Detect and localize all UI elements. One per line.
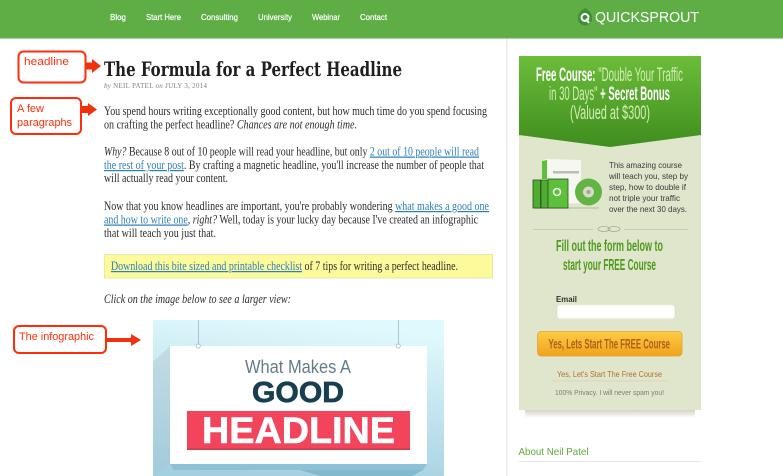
nav links bbox=[110, 12, 388, 22]
paragraph 2: the rest of your post. By crafting a magnetic headline, you'll increase the number of people that bbox=[104, 158, 484, 172]
paragraph 2: will actually read your content. bbox=[104, 171, 228, 185]
paragraph 1 bbox=[104, 104, 487, 132]
arrow: infographic bbox=[106, 334, 141, 346]
nav links: Start Here bbox=[146, 12, 181, 22]
form heading: start your FREE Course bbox=[563, 257, 656, 274]
sign: What Makes A bbox=[245, 357, 351, 377]
ornament divider bbox=[533, 226, 688, 232]
annotation: the infographic bbox=[14, 326, 141, 353]
panel header: Free Course: "Double Your Traffic bbox=[536, 65, 683, 86]
course description: not triple your traffic bbox=[609, 193, 680, 203]
logo: QUICKSPROUT bbox=[595, 9, 699, 26]
image caption: Click on the image below to see a larger view: bbox=[104, 292, 291, 306]
icon: course box and disc bbox=[533, 159, 602, 209]
paragraph 3: Now that you know headlines are important, you're probably wondering what makes a good one bbox=[104, 199, 489, 213]
paragraph 2: Why? Because 8 out of 10 people will read your headline, but only 2 out of 10 people will read bbox=[104, 144, 479, 158]
checklist callout: Download this bite sized and printable checklist of 7 tips for writing a perfect headline. bbox=[111, 259, 458, 273]
panel header: in 30 Days" + Secret Bonus bbox=[549, 84, 670, 105]
panel header bbox=[519, 56, 701, 147]
nav links: University bbox=[258, 12, 293, 22]
cta button: Yes, Lets Start The FREE Course bbox=[548, 336, 670, 352]
headline: The Formula for a Perfect Headline bbox=[104, 58, 402, 81]
panel header: (Valued at $300) bbox=[570, 103, 650, 124]
sidebar divider bbox=[506, 39, 508, 476]
annotation: headline: headline bbox=[24, 56, 69, 68]
nav links: Contact bbox=[360, 12, 388, 22]
annotation: headline bbox=[18, 52, 101, 82]
annotation: a few paragraphs: paragraphs bbox=[17, 117, 72, 129]
paragraph 1: on crafting the perfect headline? Chances are not enough time. bbox=[104, 118, 357, 132]
nav links: Webinar bbox=[312, 12, 340, 22]
navigation bar bbox=[0, 0, 783, 39]
sign: HEADLINE bbox=[202, 409, 395, 451]
annotation: a few paragraphs: A few bbox=[17, 103, 44, 115]
paragraph 1: You spend hours writing exceptionally good content, but how much time do you spend focusing bbox=[104, 104, 487, 118]
checklist callout bbox=[104, 254, 492, 278]
arrow: headline bbox=[86, 59, 101, 73]
nav links: Consulting bbox=[201, 12, 238, 22]
annotation: a few paragraphs bbox=[11, 98, 97, 134]
secondary link: Yes, Let's Start The Free Course bbox=[557, 369, 662, 379]
byline: by NEIL PATEL on JULY 3, 2014 bbox=[104, 82, 208, 90]
arrow: paragraphs bbox=[82, 103, 97, 116]
paragraph 3: and how to write one, right? Well, today is your lucky day because I've created an infographic bbox=[104, 212, 478, 226]
email field bbox=[556, 294, 674, 318]
email field: Email bbox=[556, 294, 577, 304]
course description: over the next 30 days. bbox=[609, 204, 687, 214]
panel shadow bbox=[525, 410, 695, 418]
nav links: Blog bbox=[110, 12, 126, 22]
annotation: the infographic: The infographic bbox=[19, 331, 94, 343]
sidebar heading: about: About Neil Patel bbox=[518, 446, 588, 458]
paragraph 3: that will teach you just that. bbox=[104, 226, 216, 240]
paragraph 3 bbox=[104, 199, 489, 240]
course description: step, how to double if bbox=[609, 182, 687, 192]
course description: will teach you, step by bbox=[608, 171, 689, 181]
course description: This amazing course bbox=[609, 160, 682, 170]
infographic preview bbox=[153, 320, 444, 476]
panel: free course signup bbox=[519, 56, 701, 418]
sign bbox=[170, 344, 427, 470]
sign: GOOD bbox=[252, 377, 344, 409]
cta button bbox=[538, 332, 682, 356]
privacy note: 100% Privacy. I will never spam you! bbox=[555, 388, 664, 397]
form heading bbox=[556, 238, 663, 274]
form heading: Fill out the form below to bbox=[556, 238, 663, 255]
course description bbox=[608, 160, 689, 214]
paragraph 2 bbox=[104, 144, 484, 185]
